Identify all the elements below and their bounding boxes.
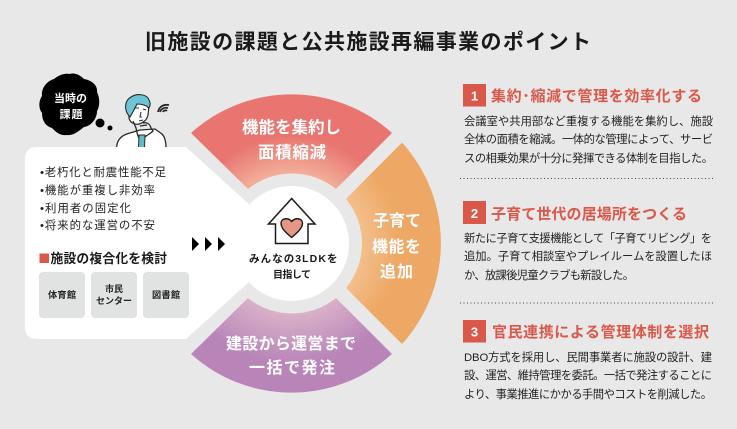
body 2: 新たに子育て支援機能として「子育てリビング」を <box>464 231 712 245</box>
man's torso <box>116 129 166 148</box>
sector: consolidate functions <box>191 94 392 189</box>
sector: add childcare functions: 子育て <box>373 211 421 230</box>
heading 1: 集約･縮減で管理を効率化する <box>491 87 702 105</box>
title: 旧施設の課題と公共施設再編事業のポイント <box>145 30 591 54</box>
number badge 1 <box>463 84 486 106</box>
number badge 3 <box>463 320 486 342</box>
body 3: DBO方式を採用し、民間事業者に施設の設計、建 <box>464 350 712 364</box>
body 1: 全体の面積を縮減。一体的な管理によって、サービ <box>464 132 713 146</box>
number badge 1: 1 <box>471 88 478 104</box>
body 3 <box>464 350 712 401</box>
center caption: みんなの3LDKを <box>249 253 338 265</box>
facility box: gym: 体育館 <box>48 289 76 300</box>
sector: consolidate functions: 面積縮減 <box>258 143 326 162</box>
issue list <box>40 165 166 232</box>
center caption <box>249 253 338 281</box>
cloud shape <box>39 73 99 135</box>
thought bubble <box>39 73 112 135</box>
man's facial features <box>135 108 146 121</box>
body 1 <box>464 114 713 165</box>
issue list: •機能が重複し非効率 <box>40 183 155 197</box>
issue list: •将来的な運営の不安 <box>40 218 155 232</box>
facility box: civic center: 市民 <box>105 283 123 294</box>
issue list: •利用者の固定化 <box>40 202 132 215</box>
man's hair <box>126 95 150 117</box>
point 1 <box>463 84 713 165</box>
bubble text: 当時の <box>54 91 87 105</box>
body 1: スの相乗効果が十分に発揮できる体制を目指した。 <box>464 151 713 165</box>
sector: add childcare functions: 追加 <box>380 263 413 281</box>
center caption: 目指して <box>273 268 311 281</box>
thought bubble: 課題 <box>60 108 82 121</box>
center circle <box>234 186 349 301</box>
illustration: thinking man <box>116 95 169 148</box>
icon: house with heart <box>268 198 315 244</box>
facility box: gym <box>39 272 85 318</box>
number badge 2: 2 <box>471 206 478 221</box>
facility box: civic center <box>91 272 137 318</box>
body 1: 会議室や共用部など重複する機能を集約し、施設 <box>464 114 713 128</box>
worry mark <box>158 105 169 112</box>
number badge 2 <box>463 201 486 224</box>
sector: bulk ordering: 一括で発注 <box>249 359 335 377</box>
point 3 <box>463 320 712 401</box>
man's face <box>129 100 149 124</box>
issue list: •老朽化と耐震性能不足 <box>40 165 166 179</box>
body 3: 設、運営、維持管理を委託。一括で発注することに <box>464 368 712 382</box>
body 2: か、放課後児童クラブも新設した。 <box>464 268 634 282</box>
body 3: より、事業推進にかかる手間やコストを削減した。 <box>464 387 712 401</box>
man's hand and arm <box>133 121 153 138</box>
man's necktie <box>138 135 145 148</box>
body 2: 追加。子育て相談室やプレイルームを設置したほ <box>464 249 712 263</box>
arrows <box>192 237 225 251</box>
facility box: library: 図書館 <box>152 289 180 300</box>
body 2 <box>464 231 712 282</box>
heading 3: 官民連携による管理体制を選択 <box>492 323 709 341</box>
sector: bulk ordering <box>191 298 392 393</box>
facility box: library <box>143 272 189 318</box>
point 2 <box>463 201 712 282</box>
heading 2: 子育て世代の居場所をつくる <box>491 206 687 223</box>
panel: old facility issues <box>25 147 292 339</box>
sector: bulk ordering: 建設から運営まで <box>226 334 356 353</box>
facility box: civic center: センター <box>96 295 132 306</box>
sector: add childcare functions <box>346 142 441 344</box>
subheading: consider combining facilities: 施設の複合化を検討 <box>50 251 167 266</box>
number badge 3: 3 <box>471 324 478 340</box>
sector: consolidate functions: 機能を集約し <box>242 117 341 137</box>
sector: add childcare functions: 機能を <box>372 237 421 256</box>
